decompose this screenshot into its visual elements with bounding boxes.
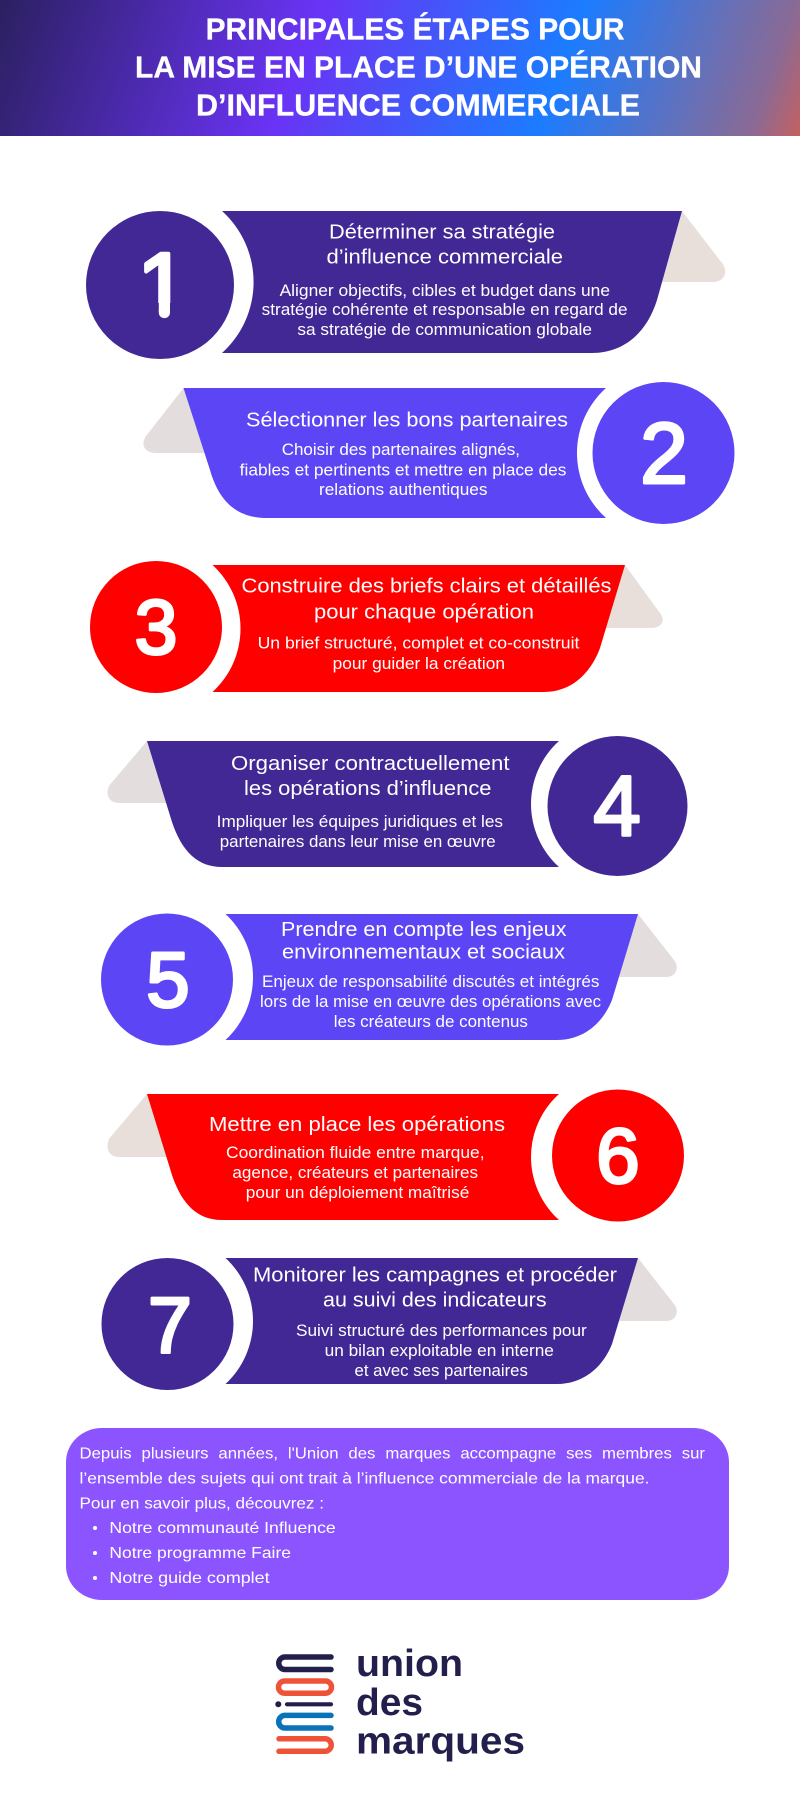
circle 6 (552, 1090, 684, 1222)
body 1: stratégie cohérente et responsable en regard de (262, 300, 628, 319)
title: LA MISE EN PLACE D’UNE OPÉRATION (135, 49, 702, 84)
title (135, 11, 702, 122)
body 5: Enjeux de responsabilité discutés et intégrés (262, 972, 599, 991)
fold 5 (595, 914, 677, 977)
body 2: Choisir des partenaires alignés, (282, 440, 520, 459)
step 2 (143, 382, 734, 524)
ribbon 2 (184, 388, 606, 518)
body 6 (226, 1143, 485, 1202)
logo wordmark (356, 1643, 525, 1762)
heading 5: environnementaux et sociaux (282, 941, 566, 964)
bullet list (93, 1520, 336, 1587)
number 3: 3 (135, 585, 177, 671)
body 3: Un brief structuré, complet et co-construit (258, 634, 580, 653)
body 2: fiables et pertinents et mettre en place des (240, 460, 566, 479)
body 5: les créateurs de contenus (334, 1012, 528, 1031)
heading 3: pour chaque opération (314, 600, 534, 623)
heading 1: d’influence commerciale (326, 245, 563, 268)
step 1 (86, 211, 725, 359)
fold 6 (108, 1094, 190, 1157)
fold 3 (580, 565, 663, 628)
heading 6: Mettre en place les opérations (209, 1113, 505, 1136)
step 5 (101, 914, 677, 1046)
body 2 (240, 440, 566, 499)
circle 3 (90, 561, 222, 693)
panel text: Depuis plusieurs années, l'Union des marques accompagne ses membres sur (80, 1445, 706, 1462)
step 6 (108, 1090, 684, 1222)
body 3: pour guider la création (333, 654, 505, 673)
fold 2 (143, 388, 230, 453)
number 7: 7 (148, 1280, 192, 1370)
step 4 (108, 736, 687, 876)
number 4: 4 (593, 760, 641, 854)
heading 7: Monitorer les campagnes et procéder (253, 1264, 617, 1287)
circle 5 (101, 914, 233, 1046)
number 5: 5 (146, 936, 190, 1024)
panel: Union des marques (66, 1428, 729, 1600)
body 5 (260, 972, 601, 1031)
heading 3: Construire des briefs clairs et détaillés (242, 575, 612, 598)
ribbon 3 (212, 565, 625, 692)
title: D’INFLUENCE COMMERCIALE (196, 87, 640, 122)
heading 5 (281, 918, 567, 964)
body 3 (258, 634, 580, 673)
logo wordmark: union (356, 1643, 463, 1685)
body 2: relations authentiques (319, 480, 488, 499)
logo wordmark: des (356, 1682, 423, 1724)
body 1: sa stratégie de communication globale (297, 320, 592, 339)
step 3 (90, 561, 663, 693)
body 7: Suivi structuré des performances pour (296, 1321, 587, 1340)
body 1 (262, 281, 628, 339)
fold 7 (595, 1258, 677, 1321)
heading 1 (326, 220, 563, 268)
panel text (80, 1445, 706, 1512)
panel text: l’ensemble des sujets qui ont trait à l’influence commerciale de la marque. (80, 1470, 650, 1487)
circle 7 (102, 1258, 234, 1390)
body 6: pour un déploiement maîtrisé (246, 1183, 469, 1202)
heading 3 (242, 575, 612, 623)
bullet list: Notre programme Faire (109, 1545, 291, 1562)
step 7 (102, 1258, 677, 1390)
bullet list: Notre communauté Influence (109, 1520, 336, 1537)
number 6: 6 (596, 1112, 640, 1200)
panel text: Pour en savoir plus, découvrez : (80, 1495, 324, 1512)
ribbon 4 (147, 741, 559, 867)
bullet list: Notre guide complet (109, 1570, 270, 1587)
ribbon 7 (226, 1258, 638, 1384)
body 7: un bilan exploitable en interne (325, 1341, 554, 1360)
title: PRINCIPALES ÉTAPES POUR (206, 11, 625, 46)
heading 4: Organiser contractuellement (231, 752, 510, 775)
number 1: 1 (137, 236, 188, 336)
heading 7 (253, 1264, 617, 1312)
heading 2: Sélectionner les bons partenaires (246, 409, 568, 432)
fold 4 (108, 741, 190, 803)
body 4 (217, 812, 503, 851)
heading 5: Prendre en compte les enjeux (281, 918, 567, 941)
fold 1 (640, 211, 725, 282)
body 6: Coordination fluide entre marque, (226, 1143, 485, 1162)
circle 4 (548, 736, 688, 876)
body 4: Impliquer les équipes juridiques et les (217, 812, 503, 831)
ribbon 5 (226, 914, 638, 1040)
heading 1: Déterminer sa stratégie (329, 220, 555, 243)
body 7 (296, 1321, 587, 1380)
logo wordmark: marques (356, 1720, 525, 1762)
body 5: lors de la mise en œuvre des opérations avec (260, 992, 601, 1011)
logo: Union des marques (275, 1643, 525, 1762)
logo icon (275, 1657, 332, 1751)
body 4: partenaires dans leur mise en œuvre (220, 832, 496, 851)
circle 1 (86, 211, 234, 359)
body 6: agence, créateurs et partenaires (232, 1163, 478, 1182)
heading 4: les opérations d’influence (244, 777, 492, 800)
ribbon 6 (147, 1094, 559, 1220)
body 1: Aligner objectifs, cibles et budget dans une (280, 281, 610, 300)
ribbon 1 (222, 211, 682, 353)
number 2: 2 (640, 406, 688, 502)
header banner (0, 0, 800, 136)
circle 2 (592, 382, 734, 524)
heading 4 (231, 752, 510, 800)
body 7: et avec ses partenaires (354, 1361, 528, 1380)
heading 7: au suivi des indicateurs (323, 1289, 547, 1312)
